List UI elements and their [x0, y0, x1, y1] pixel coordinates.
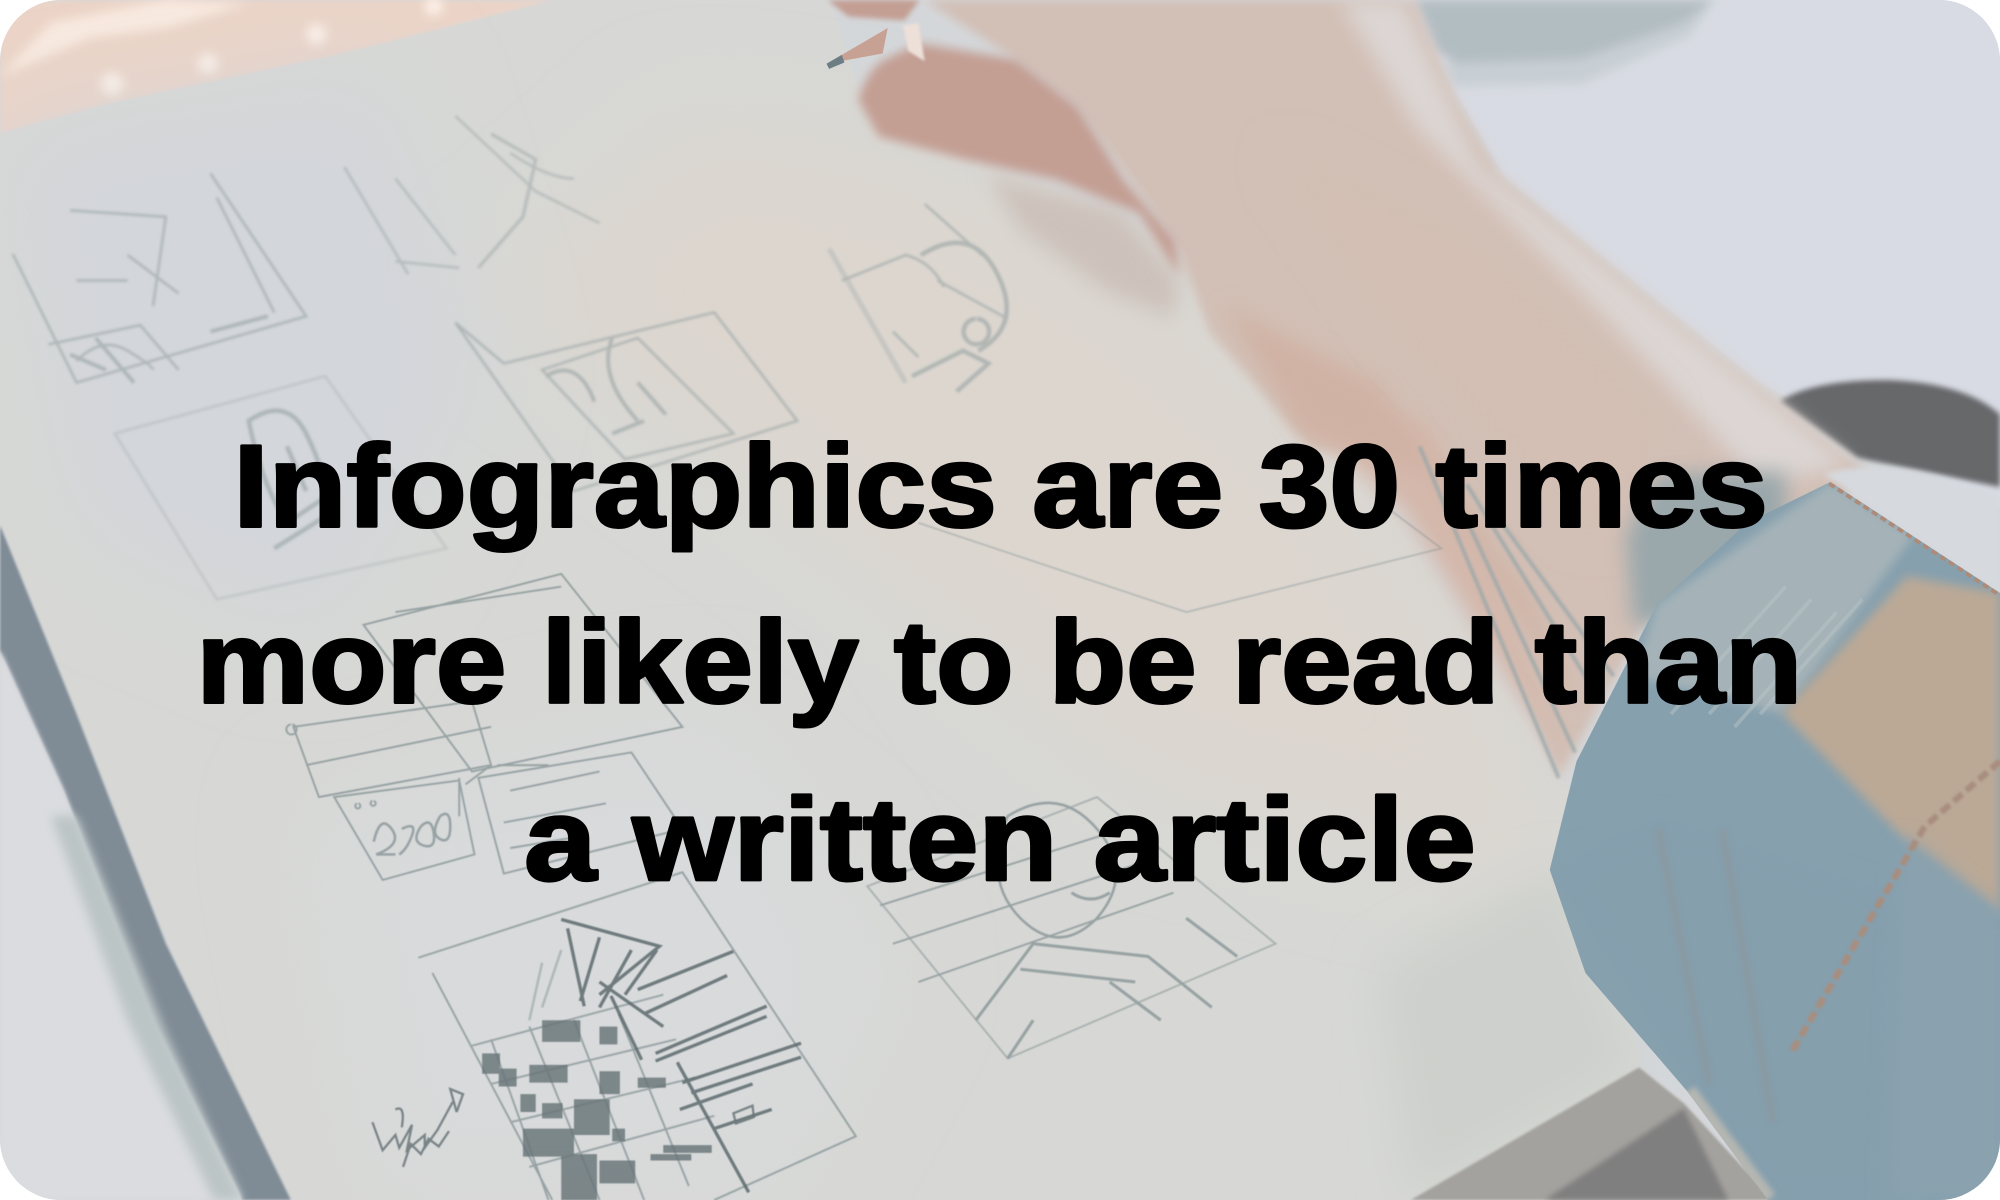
sketch: right top thumbnail — [829, 204, 1008, 391]
photo: blue arm marks — [1420, 446, 1614, 778]
sketch: dark perspective figure — [529, 919, 801, 1192]
sketch: portrait — [867, 797, 1276, 1058]
photo: cup top right — [1413, 0, 1716, 87]
photo: table top right — [1462, 0, 2000, 494]
sketch: left middle figure — [115, 376, 446, 599]
sketch: checkerboard grid — [472, 995, 714, 1200]
photo: book edge lower left — [0, 525, 291, 1200]
photo: warm lights top left — [0, 0, 557, 134]
photo: pencil — [827, 28, 888, 69]
sketch: top left thumbnail — [13, 173, 306, 383]
sketch: stool and signature scribbles — [372, 1089, 754, 1167]
photo: plaid sleeve — [1531, 472, 2000, 1200]
headline line 2: more likely to be read than — [196, 597, 1802, 728]
sketch: large empty frame — [918, 510, 1441, 612]
photo: grey shadow under hand — [986, 173, 1180, 319]
sketch: top center thumbnail — [344, 116, 599, 274]
headline — [196, 421, 1802, 905]
sketch: lower wireframes and portrait — [286, 510, 1441, 1200]
photo: blurred upper sketches — [13, 116, 1008, 599]
photo: hand and arm — [828, 0, 1871, 778]
photo: dark object right — [1779, 380, 2000, 487]
photo: white cuff — [1826, 466, 1951, 492]
photo: pages bottom edge — [1411, 1067, 1773, 1200]
sketch: dark checkerboard — [482, 1020, 712, 1200]
sketch: perspective scene frame — [418, 872, 856, 1200]
sketch: UI wireframes — [286, 574, 682, 880]
photo: dark fingers — [858, 43, 1180, 277]
sketch: center plan — [455, 312, 797, 491]
headline line 3: a written article — [524, 774, 1476, 905]
headline line 1: Infographics are 30 times — [233, 421, 1768, 552]
